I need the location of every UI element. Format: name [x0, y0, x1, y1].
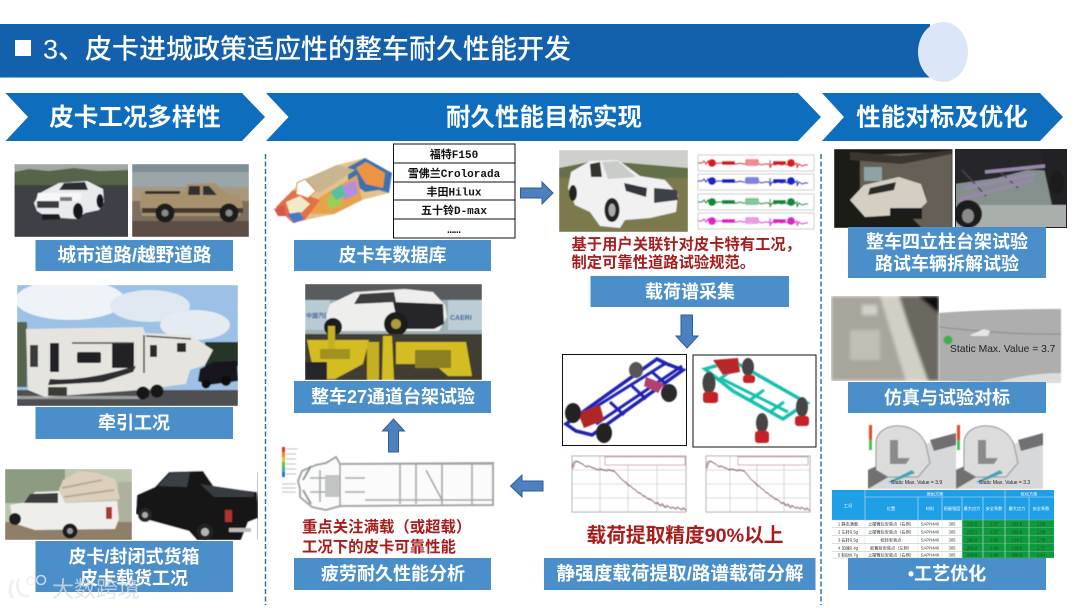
table: optimisation comparison: 208.6: [967, 552, 978, 558]
diagram: process optimisation stress plots: [868, 425, 1043, 489]
label: 仿真与试验对标: 仿真与试验对标: [884, 387, 1010, 408]
decorative circle at end of title bar: [918, 22, 968, 82]
label: 工艺优化: [848, 558, 1046, 590]
label: 皮卡/封闭式货箱 皮卡载货工况: [36, 541, 233, 592]
label text: key focus on full load: 重点关注满载（或超载）: [302, 517, 471, 536]
title text: 3、皮卡进城政策适应性的整车耐久性能开发: [43, 34, 571, 64]
arrow: database to load spectrum: [520, 182, 553, 204]
table: optimisation comparison: 5 制动0.7g: [838, 552, 859, 558]
diagram: teal chassis on test actuators: [693, 355, 816, 447]
table: optimisation comparison: 305: [948, 530, 956, 534]
table: optimisation comparison: 305: [948, 538, 956, 542]
table: optimisation comparison: 扭转安装点: [881, 536, 901, 544]
photo: 27-channel bench test rig: CAERI: [450, 315, 472, 322]
table: optimisation comparison: 1.46: [990, 552, 999, 558]
label: 皮卡/封闭式货箱 皮卡载货工况: 皮卡载货工况: [80, 568, 188, 588]
label: 仿真与试验对标: [848, 382, 1046, 413]
chevron header: 皮卡工况多样性: 皮卡工况多样性: [49, 104, 221, 132]
table: optimisation comparison: 191.9: [1012, 522, 1023, 526]
table: 皮卡车型数据库: 五十铃D-max: [421, 203, 487, 218]
photo: 27-channel bench test rig: 中国汽研: [306, 312, 330, 320]
table: optimisation comparison: 1.37: [990, 522, 999, 526]
title square bullet: [15, 40, 31, 56]
table: 皮卡车型数据库: 福特F150: [430, 147, 478, 162]
chevron header: 耐久性能目标实现: 耐久性能目标实现: [446, 104, 642, 132]
diagram: fatigue analysis frame result: [282, 447, 493, 510]
diagram: colored body-in-white CAD model: [274, 158, 392, 223]
label: 整车四立柱台架试验 路试车辆拆解试验: 路试车辆拆解试验: [875, 253, 1019, 274]
table: optimisation comparison: 204.2: [967, 546, 978, 550]
chart: measured load spectrum time histories: [692, 148, 814, 235]
diagram: simulation stress result 3.7: [939, 309, 1061, 383]
dashed divider left: [264, 154, 266, 605]
table: optimisation comparison: SAPH440: [921, 546, 940, 550]
callout: 道路试验规范: [572, 236, 801, 272]
label: 皮卡/封闭式货箱 皮卡载货工况: 皮卡/封闭式货箱: [68, 546, 200, 567]
diagram: process optimisation stress plots: Static Max. Value = 3.9: [891, 480, 942, 486]
label: 皮卡车数据库: [294, 240, 491, 271]
chevron header: 性能对标及优化: 性能对标及优化: [856, 104, 1028, 132]
table: optimisation comparison: 工况: [844, 503, 853, 509]
watermark: [10, 576, 140, 602]
table: optimisation comparison: 4 加速0.4g: [838, 544, 859, 552]
table: optimisation comparison: 222.5: [967, 522, 978, 526]
label: 整车四立柱台架试验 路试车辆拆解试验: [848, 227, 1046, 278]
photo: cracked metal part: [831, 296, 939, 381]
photo: 27-channel bench test rig: [305, 284, 482, 380]
table: 皮卡车型数据库: 丰田Hilux: [426, 184, 482, 200]
chevron header: 皮卡工况多样性: [6, 93, 265, 141]
photo: loaded pickup with sacks: [5, 469, 132, 540]
callout: 载荷提取精度: 载荷提取精度90%以上: [587, 524, 783, 547]
table: optimisation comparison: 2 左转0.5g: [838, 528, 859, 536]
table: optimisation comparison: 屈服强度: [944, 505, 961, 512]
chevron header: 耐久性能目标实现: [266, 93, 821, 141]
label: 皮卡车数据库: 皮卡车数据库: [338, 244, 446, 266]
table: optimisation comparison: 305: [948, 552, 956, 558]
table: optimisation comparison: 安全系数: [1033, 505, 1050, 512]
watermark: 大数跨境: [52, 577, 140, 602]
table: optimisation comparison: 原始方案: [927, 490, 944, 498]
label: 整车四立柱台架试验 路试车辆拆解试验: 整车四立柱台架试验: [866, 231, 1028, 252]
table: optimisation comparison: 1.59: [1037, 522, 1046, 526]
table: optimisation comparison: 上摆臂后安装点（右侧）: [868, 520, 914, 528]
table: optimisation comparison: 305: [948, 522, 956, 526]
table: optimisation comparison: 174.1: [1012, 538, 1023, 542]
table: optimisation comparison: 上摆臂后安装点（右侧）: [868, 528, 914, 536]
callout: 道路试验规范: 基于用户关联针对皮卡特有工况，: [572, 236, 801, 254]
label: 载荷谱采集: [590, 276, 789, 307]
chart: load extraction accuracy left: [572, 456, 686, 512]
photo: disassembled road test chassis: [955, 149, 1067, 228]
photo: white pickup on city road: [14, 164, 128, 237]
photo: white pickup instrumented in field: [559, 150, 688, 232]
callout: 道路试验规范: 制定可靠性道路试验规范。: [572, 254, 755, 272]
arrow: load spectrum to extraction: [676, 315, 698, 348]
table: optimisation comparison: 3 右转0.5g: [838, 536, 859, 544]
label: 城市道路/越野道路: [36, 240, 233, 271]
table: optimisation comparison: 305: [948, 546, 956, 550]
table: optimisation comparison: 1 静态满载: [838, 520, 859, 528]
label text: key focus on full load: 工况下的皮卡可靠性能: [302, 537, 457, 556]
label: 牵引工况: 牵引工况: [98, 413, 170, 433]
label: 整车27通道台架试验: [294, 381, 491, 413]
photo: four-post bench test in lab: [834, 149, 952, 228]
label: 牵引工况: [36, 407, 233, 439]
table: optimisation comparison: 材料: [926, 505, 935, 512]
chart: load extraction accuracy right: [706, 456, 810, 512]
table: optimisation comparison: 1.60: [990, 538, 999, 542]
table: optimisation comparison: 1.71: [1037, 546, 1046, 550]
table: optimisation comparison: SAPH440: [921, 538, 940, 542]
table: optimisation comparison: 178.5: [1012, 546, 1023, 550]
diagram: simulation stress result 3.7: Static Max. Value = 3.7: [950, 344, 1056, 355]
arrow: fatigue analysis to bench test: [382, 419, 404, 452]
panel: 耐久性能目标实现: [274, 144, 816, 590]
table: optimisation comparison: 位置: [887, 505, 895, 512]
label: 疲劳耐久性能分析: [294, 558, 491, 590]
photo: tan pickup off road: [132, 164, 249, 237]
table: 皮卡车型数据库: [394, 144, 515, 238]
photo: trailer towing: [17, 285, 238, 406]
panel: 皮卡工况多样性: [5, 164, 258, 592]
table: optimisation comparison: 1.58: [1037, 530, 1046, 534]
label text: key focus on full load: [302, 517, 471, 556]
label: 载荷谱采集: 载荷谱采集: [645, 281, 735, 302]
table: optimisation comparison: 上摆臂后安装点（右侧）: [868, 552, 914, 558]
table: 皮卡车型数据库: 雪佛兰Crolorada: [408, 166, 501, 181]
label: 城市道路/越野道路: 城市道路/越野道路: [58, 244, 212, 266]
title bar: [0, 22, 968, 82]
table: optimisation comparison: 1.37: [990, 530, 999, 534]
table: optimisation comparison: 186.2: [1012, 552, 1023, 558]
table: optimisation comparison: 192.5: [1012, 530, 1023, 534]
table: 皮卡车型数据库: ……: [447, 225, 461, 237]
panel: 性能对标及优化: [831, 149, 1067, 590]
chevron header: 性能对标及优化: [822, 93, 1063, 141]
label: 静强度载荷提取/路谱载荷分解: [544, 558, 816, 590]
label: 静强度载荷提取/路谱载荷分解: 静强度载荷提取/路谱载荷分解: [557, 563, 803, 584]
table: optimisation comparison: SAPH440: [921, 522, 940, 526]
table: optimisation comparison: 安全系数: [986, 505, 1003, 512]
diagram: process optimisation stress plots: Static Max. Value = 3.3: [979, 480, 1030, 486]
table: optimisation comparison: SAPH440: [921, 530, 940, 534]
table: optimisation comparison: 1.49: [990, 546, 999, 550]
dashed divider right: [820, 154, 822, 605]
diagram: blue chassis multibody model: [562, 354, 686, 446]
label: 工艺优化: •工艺优化: [908, 563, 986, 584]
table: optimisation comparison: [832, 490, 1054, 558]
photo: black pickup with tonneau cover: [136, 470, 258, 540]
arrow: extraction to fatigue analysis: [510, 475, 543, 497]
table: optimisation comparison: 最大应力: [964, 505, 980, 512]
table: optimisation comparison: 223.1: [967, 530, 978, 534]
table: optimisation comparison: 最大应力: [1009, 505, 1025, 512]
table: optimisation comparison: 优化方案: [1021, 490, 1038, 498]
table: optimisation comparison: 板簧前安装点（左侧）: [870, 544, 912, 552]
label: 疲劳耐久性能分析: 疲劳耐久性能分析: [321, 563, 465, 584]
table: optimisation comparison: 1.75: [1037, 538, 1046, 542]
table: optimisation comparison: 190.0: [967, 538, 978, 542]
table: optimisation comparison: 1.64: [1037, 552, 1046, 558]
table: optimisation comparison: SAPH440: [921, 552, 940, 558]
label: 整车27通道台架试验: 整车27通道台架试验: [311, 386, 475, 407]
